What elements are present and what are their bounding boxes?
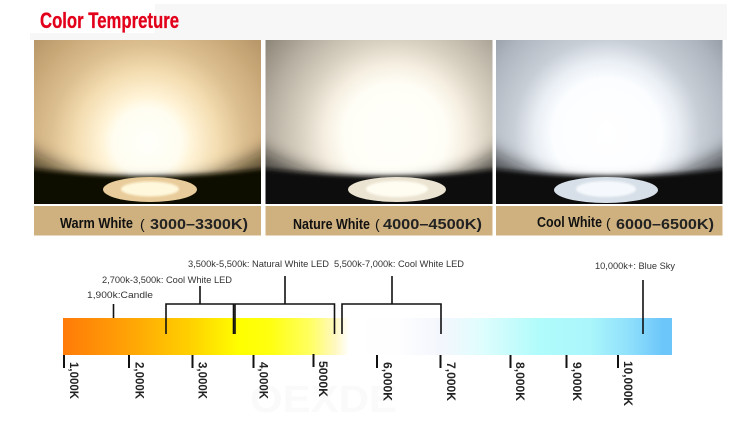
label 6,000K: 6,000K <box>380 362 394 401</box>
label 8,000K: 8,000K <box>513 362 527 401</box>
label 7,000K: 7,000K <box>444 362 458 401</box>
warm white label: ( <box>140 216 145 232</box>
cool white label: 6000–6500K) <box>616 216 714 233</box>
label 3,000K: 3,000K <box>196 362 210 399</box>
label 5000K: 5000K <box>316 361 330 397</box>
nature white label <box>266 206 492 236</box>
callouts <box>87 259 675 301</box>
label 9,000K: 9,000K <box>570 362 584 401</box>
callout: candle: 1,900k:Candle <box>87 290 153 301</box>
watermark: OEXDE <box>250 379 397 421</box>
title: Color Tempreture <box>40 8 179 33</box>
callout: 2700-3500: 2,700k-3,500k: Cool White LED <box>102 275 232 286</box>
colour temperature bar <box>63 318 672 355</box>
axis labels <box>67 361 635 406</box>
label 1,000K: 1,000K <box>67 362 81 399</box>
label 2,000K: 2,000K <box>132 362 146 399</box>
nature white label: ( <box>375 216 380 232</box>
warm white label: 3000–3300K) <box>150 216 248 233</box>
label 10,000K: 10,000K <box>621 361 635 406</box>
nature white label: Nature White <box>293 217 370 233</box>
brackets <box>114 276 643 334</box>
panel: cool white <box>496 40 722 236</box>
cool white label: Cool White <box>537 215 602 231</box>
callout: 3500-5500: 3,500k-5,500k: Natural White LED <box>188 259 329 270</box>
cool white photo <box>496 40 722 204</box>
header band <box>30 4 727 40</box>
cool white label <box>496 206 722 236</box>
panel: nature white <box>266 40 492 236</box>
warm white photo <box>34 40 261 204</box>
label 4,000K: 4,000K <box>256 362 270 399</box>
cool white label: ( <box>606 215 611 231</box>
tick marks <box>64 354 618 368</box>
callout: 5500-7000: 5,500k-7,000k: Cool White LED <box>334 259 464 270</box>
callout: blue sky: 10,000k+: Blue Sky <box>595 261 675 272</box>
warm white label: Warm White <box>60 216 133 232</box>
nature white photo <box>266 40 492 204</box>
nature white label: 4000–4500K) <box>383 216 482 233</box>
panel: warm white <box>34 40 261 236</box>
warm white label <box>34 206 261 236</box>
